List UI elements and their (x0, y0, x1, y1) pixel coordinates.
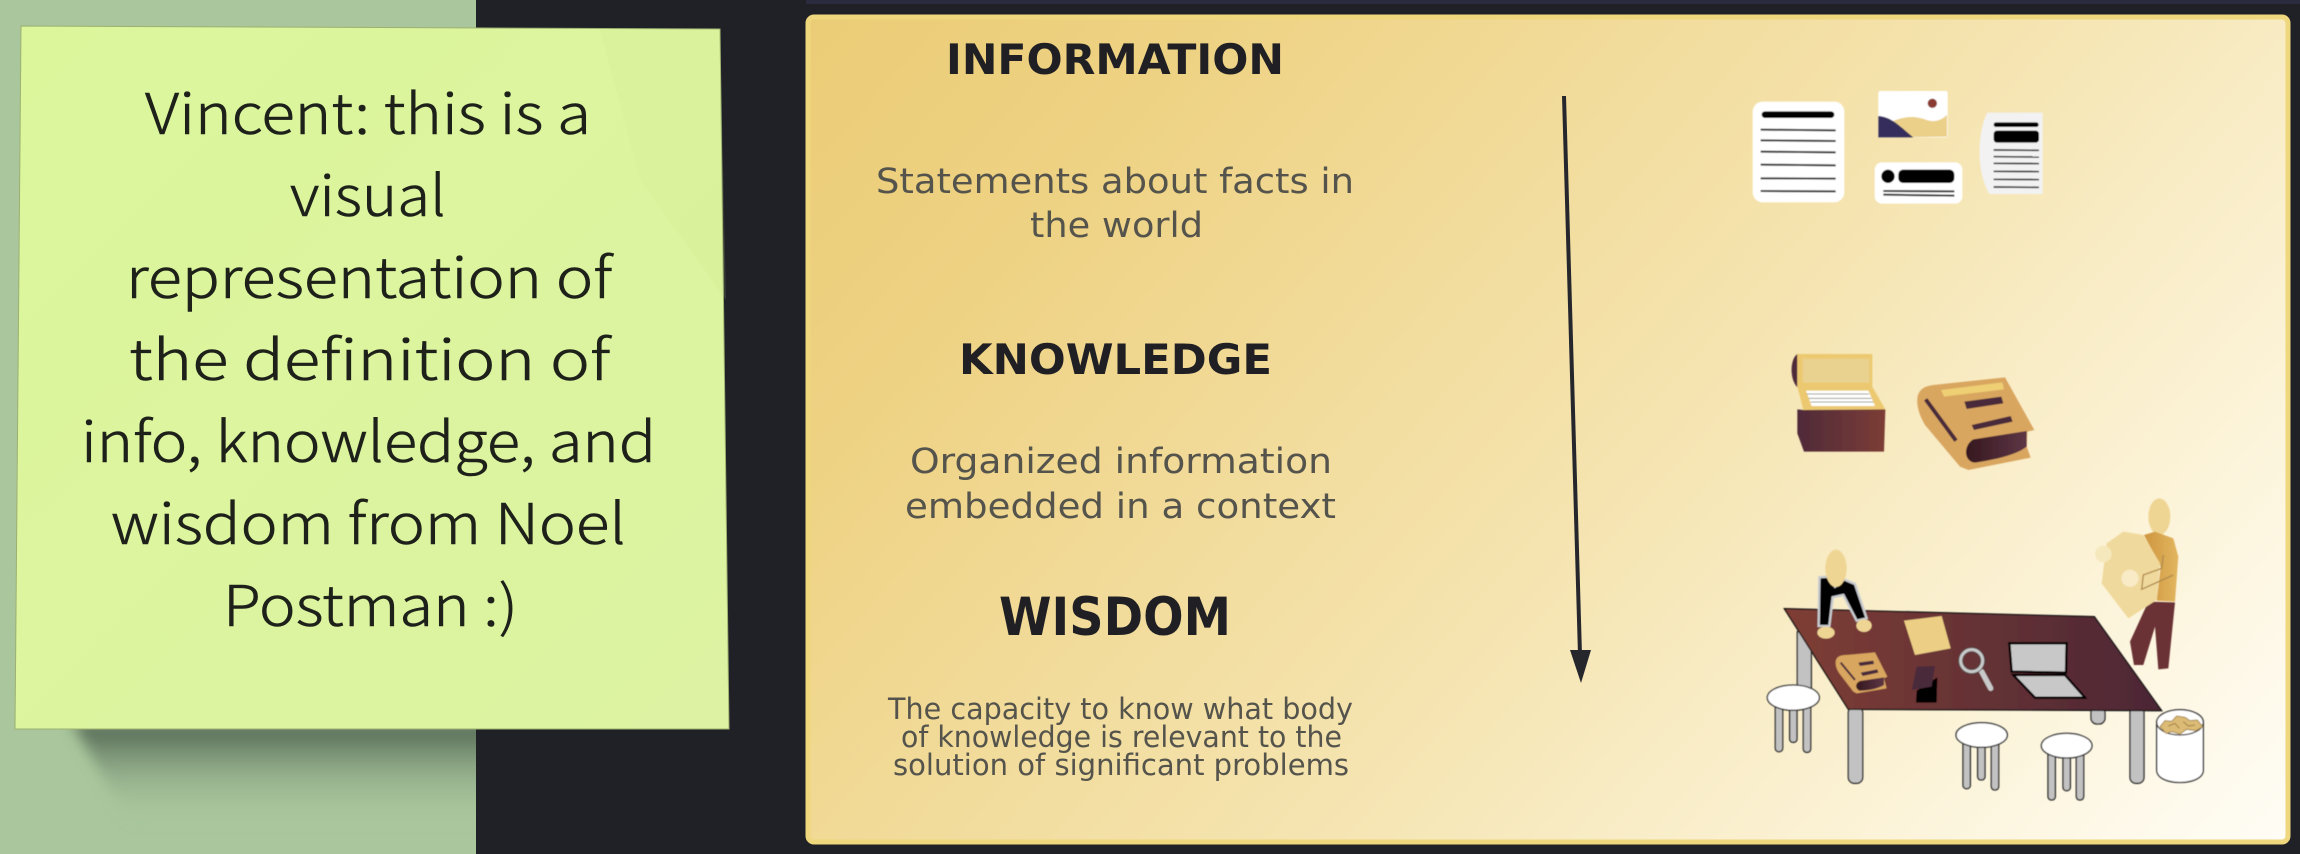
information definition (876, 162, 1354, 246)
knowledge definition (905, 442, 1336, 527)
sticky note text: Vincent: this is a (145, 70, 591, 151)
heading: information: INFORMATION (946, 35, 1284, 84)
wisdom definition: The capacity to know what body (887, 692, 1353, 726)
icon group: knowledge box and book (1792, 354, 2034, 470)
heading: knowledge: KNOWLEDGE (959, 335, 1272, 384)
sticky note text: the definition of (129, 316, 613, 397)
sticky note shadow (68, 730, 476, 796)
magnifying glass (1961, 650, 1991, 688)
stool: left (1767, 685, 1819, 752)
sticky note text (81, 70, 656, 643)
waste bin (2157, 710, 2203, 782)
sticky note text: info, knowledge, and (81, 398, 656, 479)
table legs (1797, 632, 2144, 783)
information definition: the world (1030, 206, 1203, 246)
sticky note text: visual (290, 152, 446, 233)
arrow: downward progression (1564, 96, 1591, 683)
knowledge definition: embedded in a context (905, 487, 1336, 527)
wisdom definition: of knowledge is relevant to the (901, 720, 1342, 754)
sticky note text: wisdom from Noel (111, 480, 626, 561)
sticky note text: Postman :) (223, 562, 518, 643)
icon group: information documents (1753, 91, 2043, 204)
icon: landscape image (1878, 91, 1948, 137)
icon: text page (1753, 102, 1844, 202)
sticky note (15, 26, 729, 729)
illustration: people at a table (1767, 498, 2203, 800)
table top (1784, 609, 2162, 711)
wisdom definition (887, 692, 1353, 782)
stool: middle (1956, 723, 2007, 790)
stamp object (1912, 666, 1937, 703)
paper sheet (1904, 616, 1951, 655)
icon: contact card (1875, 162, 1962, 204)
icon: book (1917, 377, 2034, 470)
wisdom definition: solution of significant problems (893, 748, 1349, 782)
knowledge definition: Organized information (910, 442, 1332, 482)
yellow content card (808, 17, 2288, 842)
icon: file box (1792, 354, 1885, 452)
information definition: Statements about facts in (876, 162, 1354, 202)
icon: article page (1980, 113, 2043, 194)
stool: right (2041, 733, 2092, 800)
standing person with puzzle piece (2095, 498, 2178, 669)
small book (1836, 652, 1887, 693)
laptop (2009, 643, 2085, 698)
heading: wisdom: WISDOM (999, 587, 1231, 648)
sticky note text: representation of (126, 234, 615, 315)
top edge strip (806, 0, 2300, 4)
green background panel (0, 0, 476, 854)
seated person (1817, 550, 1872, 639)
